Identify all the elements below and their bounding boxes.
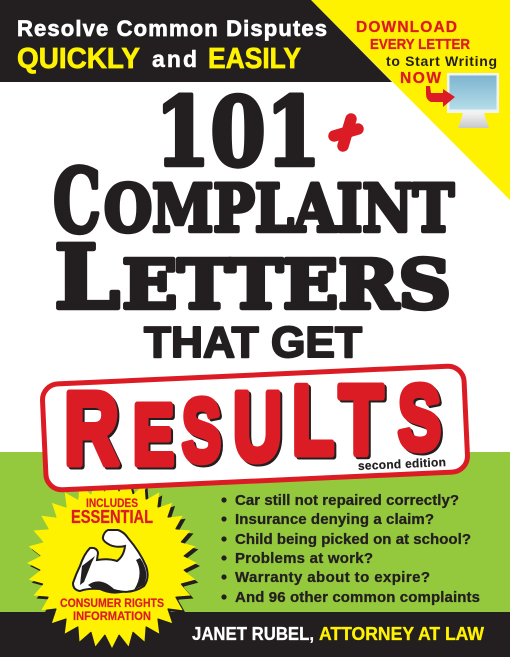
banner headline: QUICKLY <box>17 43 140 75</box>
download callout text: DOWNLOAD <box>356 19 457 36</box>
title: Letters: ETTERS <box>122 245 451 324</box>
banner headline: EASILY <box>208 43 301 75</box>
results lettering: E <box>133 388 174 483</box>
green band <box>0 452 510 613</box>
results lettering: R <box>66 373 121 488</box>
bullet list of complaints: Car still not repaired correctly? <box>235 492 459 509</box>
banner headline <box>17 16 327 75</box>
title: Letters: L <box>54 225 120 329</box>
results lettering <box>64 365 443 488</box>
starburst badge <box>27 478 200 651</box>
starburst badge: ESSENTIAL <box>71 507 153 527</box>
second edition label: second edition <box>358 455 446 473</box>
download callout text: EVERY LETTER <box>370 36 470 53</box>
title: Complaint <box>53 149 454 253</box>
starburst badge: CONSUMER RIGHTS <box>60 596 164 610</box>
title: Complaint: C <box>53 149 101 253</box>
bullet list of complaints: Child being picked on at school? <box>235 531 471 548</box>
results lettering: S <box>182 380 221 480</box>
bottom black band <box>0 612 510 657</box>
results lettering: S <box>184 382 223 482</box>
bullet list of complaints <box>221 492 480 606</box>
bullet list of complaints: Insurance denying a claim? <box>235 511 434 528</box>
icon: computer monitor <box>447 73 499 128</box>
results lettering: S <box>400 369 443 471</box>
yellow corner triangle <box>311 0 510 200</box>
title: Letters <box>54 225 451 329</box>
top black banner <box>0 0 392 82</box>
arrow to monitor <box>426 86 455 107</box>
author line: ATTORNEY AT LAW <box>319 624 484 644</box>
title: 101: 101 <box>155 77 321 188</box>
banner headline: Resolve Common Disputes <box>17 16 327 41</box>
results lettering: L <box>294 367 336 477</box>
results lettering: U <box>233 372 282 481</box>
banner headline: and <box>152 46 197 72</box>
bullet list of complaints: Warranty about to expire? <box>235 569 430 586</box>
results lettering: U <box>235 374 284 483</box>
author line: JANET RUBEL, <box>192 624 314 644</box>
starburst badge: INCLUDES <box>86 496 138 510</box>
results lettering: E <box>135 390 176 485</box>
download callout text <box>356 19 497 87</box>
icon: flexed arm <box>73 530 148 594</box>
results stamp <box>42 365 468 491</box>
red plus sign <box>334 119 358 146</box>
results lettering: L <box>292 365 334 475</box>
starburst badge: INFORMATION <box>73 609 151 623</box>
results lettering: S <box>398 367 441 469</box>
results lettering: T <box>339 365 383 475</box>
author line <box>192 624 484 644</box>
results lettering: T <box>341 367 385 477</box>
results lettering: R <box>64 371 119 486</box>
download callout text: NOW <box>400 70 441 87</box>
bullet list of complaints: Problems at work? <box>235 550 373 567</box>
title: Complaint: OMPLAINT <box>104 171 454 247</box>
bullet list of complaints: And 96 other common complaints <box>235 589 480 606</box>
download callout text: to Start Writing <box>386 53 497 69</box>
title: That Get: THAT GET <box>144 318 362 367</box>
